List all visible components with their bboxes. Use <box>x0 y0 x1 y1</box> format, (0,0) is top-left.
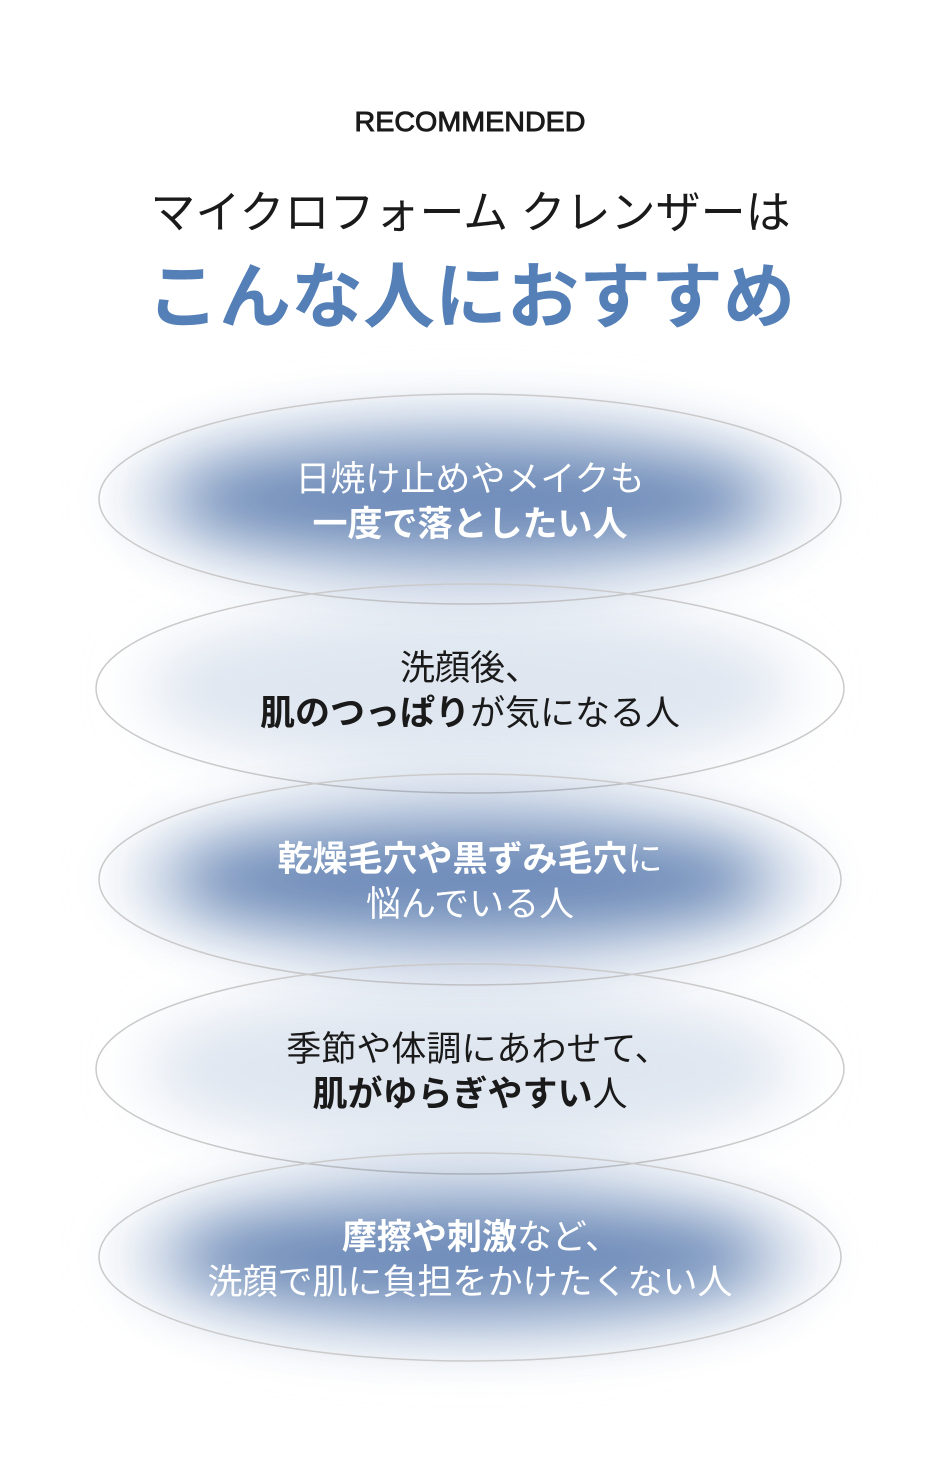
oval 3 text: 乾燥毛穴や黒ずみ毛穴に <box>277 840 663 879</box>
eyebrow: RECOMMENDED: RECOMMENDED <box>354 106 586 137</box>
heading line: product name: マイクロフォーム クレンザーは <box>150 187 791 238</box>
oval 4 text: 人 <box>592 1075 628 1114</box>
panel: oval 1 <box>99 394 841 604</box>
oval 1 text: 日焼け止めやメイクも <box>295 460 645 499</box>
oval 5 text: 摩擦や刺激など、 <box>342 1218 620 1257</box>
panel: oval 3 <box>99 774 841 985</box>
oval 5 text: 洗顔で肌に負担をかけたくない人 <box>207 1263 733 1302</box>
oval 4 text: 肌がゆらぎやすい <box>312 1075 592 1114</box>
panel: oval 2 <box>96 584 844 793</box>
panel: oval 4 <box>96 964 844 1174</box>
oval 3 text: 悩んでいる人 <box>366 885 574 924</box>
oval 1 text: 一度で落としたい人 <box>312 505 628 544</box>
oval 2 text: 洗顔後、 <box>400 649 540 688</box>
oval 2 text: が気になる人 <box>470 694 680 733</box>
oval 4 text: 季節や体調にあわせて、 <box>286 1030 670 1069</box>
panel: oval 5 <box>99 1153 841 1361</box>
oval 2 text: 肌のつっぱり <box>260 694 470 733</box>
heading line: main title: こんな人におすすめ <box>147 258 795 338</box>
